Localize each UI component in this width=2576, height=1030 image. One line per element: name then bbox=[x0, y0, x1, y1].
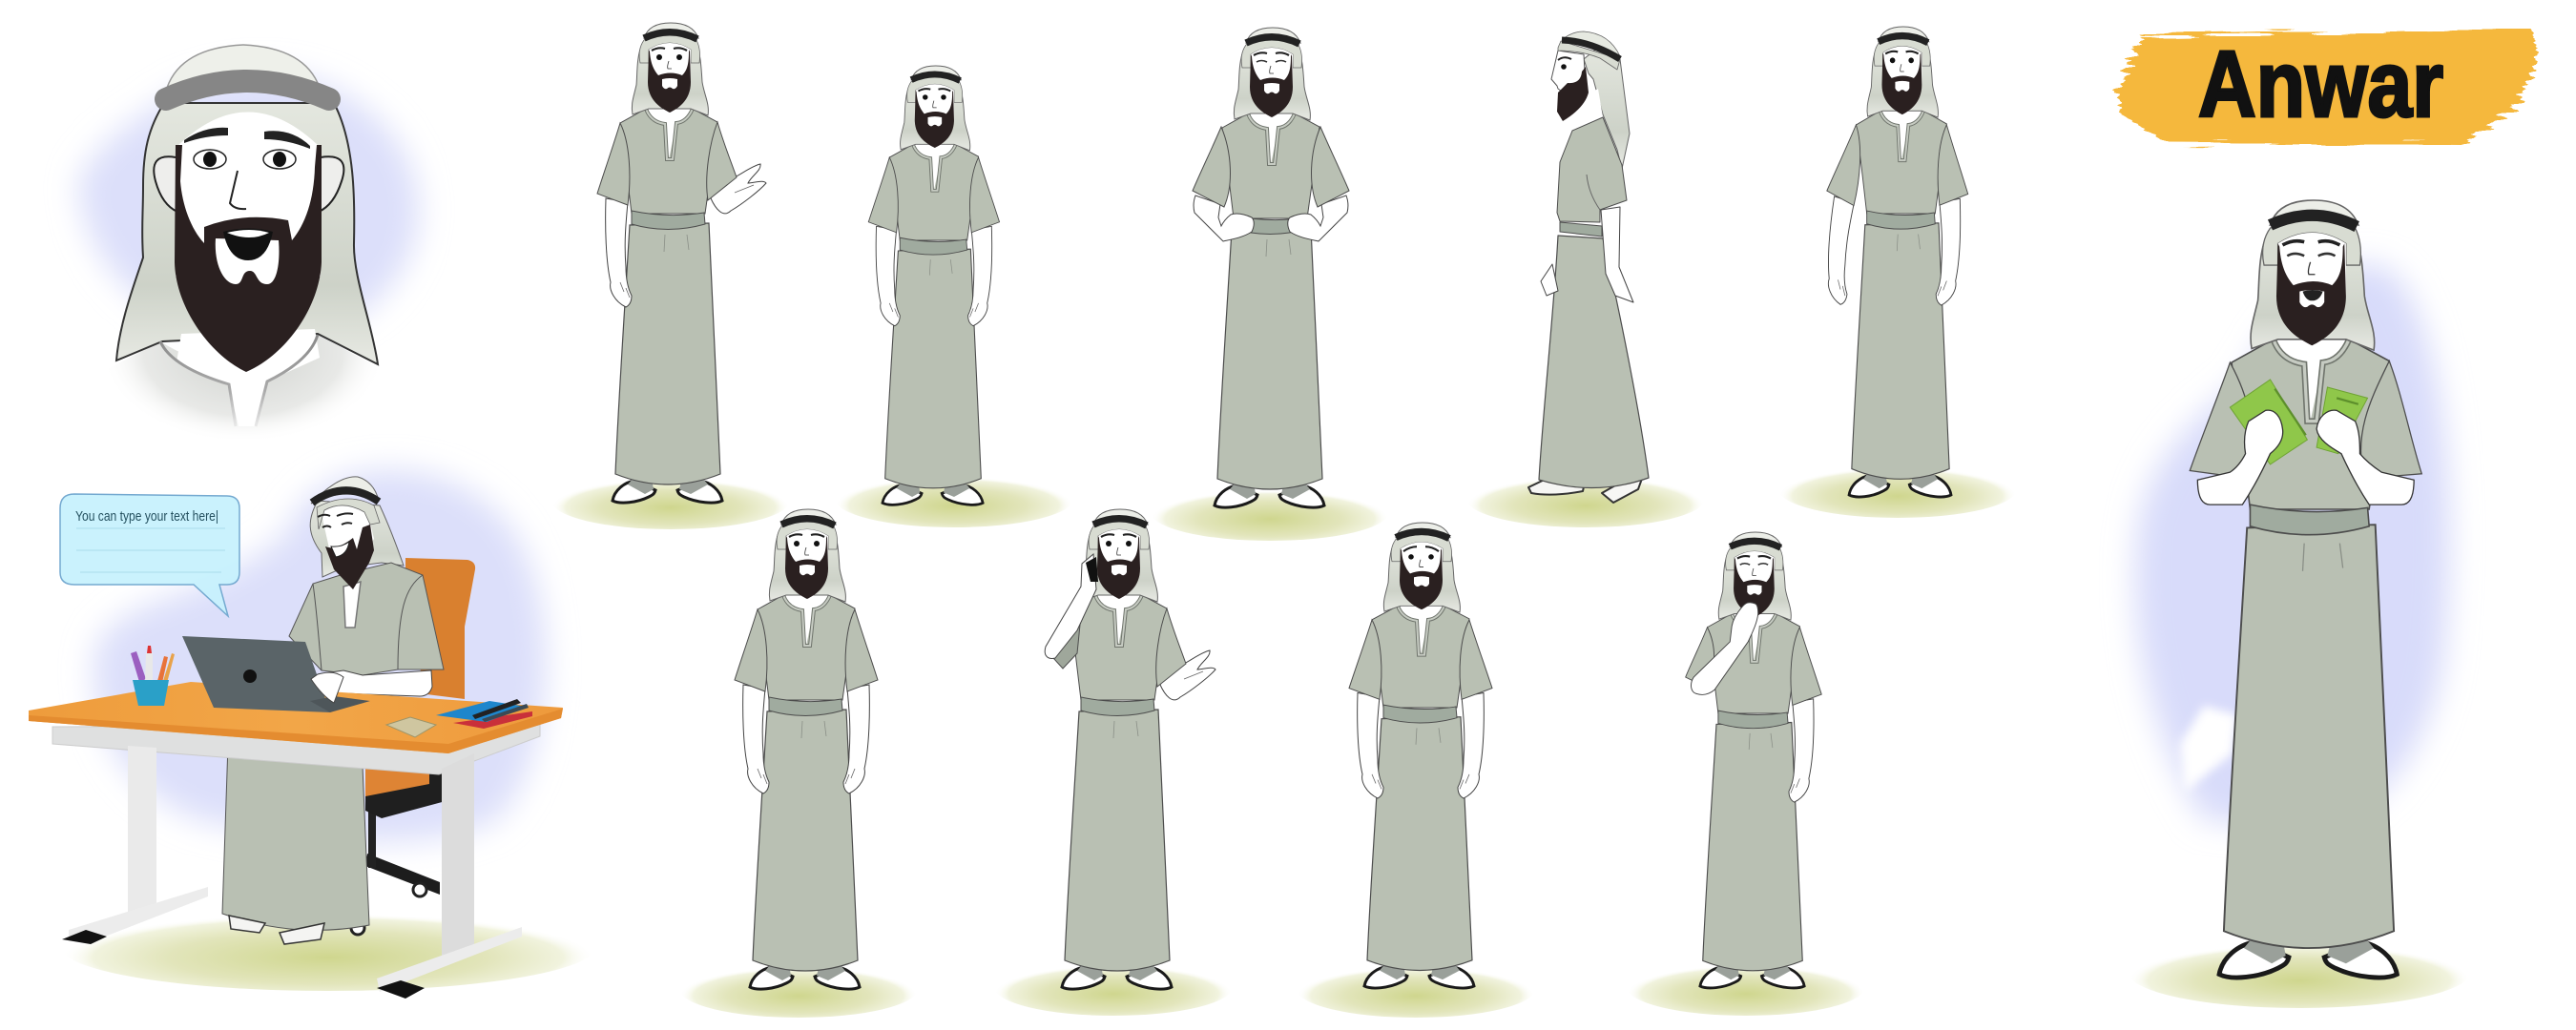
ground shadow bbox=[679, 960, 918, 1018]
portrait headband bbox=[166, 81, 329, 99]
side back arm bbox=[1601, 207, 1633, 302]
side band bbox=[1562, 40, 1620, 59]
hand-to-mouth forearm bbox=[1691, 603, 1758, 694]
portrait watercolor blob bbox=[78, 73, 419, 336]
phone handset bbox=[1086, 557, 1098, 582]
small book bbox=[386, 717, 436, 737]
office chair bbox=[351, 558, 475, 935]
left desk foot bbox=[62, 887, 208, 944]
right desk leg bbox=[442, 753, 474, 961]
side torso bbox=[1557, 117, 1627, 222]
portrait brows and nose bbox=[184, 128, 310, 149]
side beard bbox=[1557, 67, 1589, 121]
seated torso and sleeves bbox=[289, 563, 444, 703]
ground shadow bbox=[1151, 484, 1389, 541]
desk scene watercolor blob bbox=[93, 469, 546, 842]
main figure: Anwar counting money bbox=[2128, 200, 2471, 1008]
name banner: Anwar bbox=[2116, 29, 2538, 145]
portrait ears bbox=[154, 156, 343, 212]
speech bubble text: You can type your text here| bbox=[75, 509, 218, 525]
side sandals bbox=[1528, 476, 1586, 495]
name text: Anwar bbox=[2198, 31, 2443, 136]
portrait dome bbox=[167, 45, 320, 88]
phone arm bbox=[1045, 554, 1096, 658]
right arm and hand bbox=[2316, 410, 2414, 505]
figure: worried, bottom row 3 bbox=[1297, 523, 1535, 1018]
desk scene ground shadow bbox=[61, 903, 595, 991]
side dome bbox=[1562, 31, 1620, 56]
side eye bbox=[1561, 64, 1567, 70]
main ground shadow bbox=[2128, 936, 2471, 1008]
left sleeve bbox=[2190, 362, 2252, 479]
laptop bbox=[182, 636, 370, 712]
portrait eyes bbox=[194, 150, 296, 169]
figure: on the phone, bottom row 2 bbox=[994, 509, 1233, 1016]
figure: side profile, top row 4 bbox=[1466, 31, 1705, 527]
left desk leg bbox=[128, 746, 156, 913]
side face bbox=[1551, 51, 1586, 98]
white paint gap bbox=[2180, 706, 2237, 792]
figure: hand to mouth, bottom row 4 bbox=[1627, 532, 1865, 1016]
ground shadow bbox=[994, 958, 1233, 1016]
ground shadow bbox=[1627, 958, 1865, 1016]
ground shadow bbox=[551, 472, 790, 529]
figure: neutral standing, top row 2 bbox=[835, 66, 1073, 527]
right sleeve bbox=[2360, 360, 2421, 479]
phone sleeve bbox=[1053, 615, 1081, 669]
side robe skirt bbox=[1539, 236, 1649, 488]
portrait chin patch bbox=[216, 238, 279, 284]
portrait beard bbox=[175, 145, 322, 372]
portrait neck and collar bbox=[177, 329, 320, 426]
figure: hands on hips, top row 3 bbox=[1151, 28, 1389, 541]
side headcloth bbox=[1584, 46, 1630, 169]
figure: presenting, top row 1 bbox=[551, 23, 790, 529]
side sleeve seam bbox=[1587, 175, 1600, 210]
portrait mouth bbox=[223, 229, 273, 260]
ground shadow bbox=[835, 470, 1073, 527]
ground shadow bbox=[1297, 960, 1535, 1018]
desk frame rail bbox=[52, 725, 540, 774]
notebook stack bbox=[436, 699, 532, 729]
sandals under desk bbox=[229, 916, 324, 944]
ground shadow bbox=[1466, 470, 1705, 527]
ground shadow bbox=[1778, 461, 2017, 518]
left arm and hand bbox=[2197, 410, 2283, 505]
portrait: Anwar head close-up bbox=[78, 45, 419, 439]
orange brush stroke bbox=[2116, 29, 2538, 145]
front hand bbox=[1541, 264, 1558, 296]
desk top bbox=[29, 682, 563, 753]
seated head cloth back bbox=[310, 501, 404, 577]
portrait shoulders bbox=[86, 335, 401, 439]
portrait face bbox=[176, 113, 321, 277]
pen cup bbox=[131, 646, 175, 706]
side belt bbox=[1560, 222, 1602, 237]
side neck bbox=[1579, 89, 1603, 131]
speech bubble bbox=[60, 494, 239, 616]
typing hand bbox=[311, 672, 343, 703]
open smile bbox=[2303, 290, 2323, 300]
right desk foot bbox=[377, 927, 522, 999]
hand-to-mouth sleeve bbox=[1686, 628, 1714, 688]
scene: Anwar at desk bbox=[29, 469, 595, 999]
seated head bbox=[311, 477, 380, 589]
side headcloth front fold bbox=[1558, 41, 1620, 70]
figure: three-quarter view, top row 5 bbox=[1778, 27, 2017, 518]
main figure watercolor blob bbox=[2135, 263, 2450, 828]
money right bbox=[2316, 387, 2368, 454]
money left bbox=[2230, 380, 2307, 464]
figure: neutral, bottom row 1 bbox=[679, 509, 918, 1018]
portrait headcloth bbox=[116, 103, 378, 364]
seated robe lower bbox=[222, 744, 369, 930]
